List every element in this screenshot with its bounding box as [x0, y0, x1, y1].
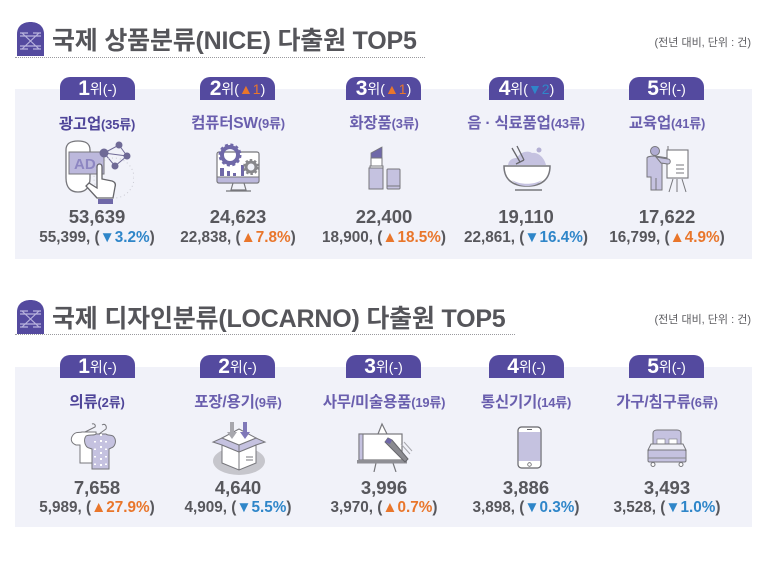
- category label 2: 컴퓨터SW(9류): [191, 115, 285, 132]
- rank tab 5: 5위(-): [647, 355, 686, 378]
- value 5: 17,622: [639, 206, 695, 227]
- icon: rice bowl: [503, 146, 551, 191]
- category label 4: 음 · 식료품업(43류): [467, 115, 585, 132]
- heading: 국제 디자인분류(LOCARNO) 다출원 TOP5: [52, 305, 506, 333]
- category label 1: 의류(2류): [69, 394, 125, 411]
- category label 1: 광고업(35류): [59, 116, 135, 133]
- unit note: (전년 대비, 단위 : 건): [654, 37, 751, 49]
- rank tab 3: [346, 355, 421, 378]
- heading: 국제 상품분류(NICE) 다출원 TOP5: [52, 27, 417, 55]
- comparison 5: 16,799, (▲4.9%): [609, 229, 725, 246]
- comparison 2: 22,838, (▲7.8%): [180, 229, 296, 246]
- icon: teacher at board: [646, 146, 689, 192]
- value 3: 22,400: [356, 206, 412, 227]
- rank tab 1: [60, 355, 135, 378]
- icon: section emblem: [17, 300, 44, 334]
- rank tab 5: [629, 355, 704, 378]
- comparison 4: 3,898, (▼0.3%): [472, 499, 580, 516]
- category label 4: 통신기기(14류): [481, 394, 571, 411]
- value 5: 3,493: [644, 477, 690, 498]
- comparison 5: 3,528, (▼1.0%): [614, 499, 720, 516]
- panel: NICE ranking: [15, 89, 752, 259]
- icon: easel and brush: [357, 422, 412, 472]
- rank tab 1: 1위(-): [78, 355, 117, 378]
- icon: open box: [212, 422, 266, 475]
- value 2: 24,623: [210, 206, 266, 227]
- value 3: 3,996: [361, 477, 407, 498]
- rank tab 2: 2위(▲1): [210, 77, 265, 100]
- category label 5: 교육업(41류): [629, 115, 705, 132]
- category label 3: 사무/미술용품(19류): [323, 394, 445, 411]
- section: NICE top 5: [15, 22, 752, 259]
- rank tab 3: 3위(▲1): [356, 77, 411, 100]
- comparison 3: 3,970, (▲0.7%): [330, 499, 438, 516]
- unit note: (전년 대비, 단위 : 건): [654, 314, 751, 326]
- icon: bed: [647, 430, 687, 467]
- value 4: 3,886: [503, 477, 549, 498]
- value 1: 53,639: [69, 206, 125, 227]
- rank tab 1: 1위(-): [78, 77, 117, 100]
- section: LOCARNO top 5: [15, 300, 752, 527]
- category label 2: 포장/용기(9류): [194, 394, 282, 411]
- icon: advertising: AD: [74, 156, 96, 173]
- category label 3: 화장품(3류): [349, 115, 419, 132]
- icon: section emblem: [17, 22, 44, 56]
- rank tab 1: [60, 77, 135, 100]
- category label 5: 가구/침구류(6류): [616, 394, 718, 411]
- rank tab 2: 2위(-): [218, 355, 257, 378]
- rank tab 2: [200, 355, 275, 378]
- comparison 1: 55,399, (▼3.2%): [39, 229, 155, 246]
- icon: advertising: [65, 140, 134, 204]
- comparison 1: 5,989, (▲27.9%): [39, 499, 155, 516]
- rank tab 3: 3위(-): [364, 355, 403, 378]
- comparison 2: 4,909, (▼5.5%): [184, 499, 292, 516]
- value 1: 7,658: [74, 477, 120, 498]
- value 2: 4,640: [215, 477, 261, 498]
- comparison 3: 18,900, (▲18.5%): [322, 229, 446, 246]
- icon: clothes on hangers: [70, 423, 116, 470]
- panel: LOCARNO ranking: [15, 367, 752, 527]
- comparison 4: 22,861, (▼16.4%): [464, 229, 588, 246]
- value 4: 19,110: [498, 206, 554, 227]
- icon: computer software: [216, 144, 260, 192]
- rank tab 5: 5위(-): [647, 77, 686, 100]
- icon: lipstick: [368, 146, 400, 190]
- icon: smartphone: [517, 426, 542, 469]
- rank tab 4: [489, 355, 564, 378]
- rank tab 5: [629, 77, 704, 100]
- rank tab 4: 4위(-): [507, 355, 546, 378]
- rank tab 4: 4위(▼2): [499, 77, 554, 100]
